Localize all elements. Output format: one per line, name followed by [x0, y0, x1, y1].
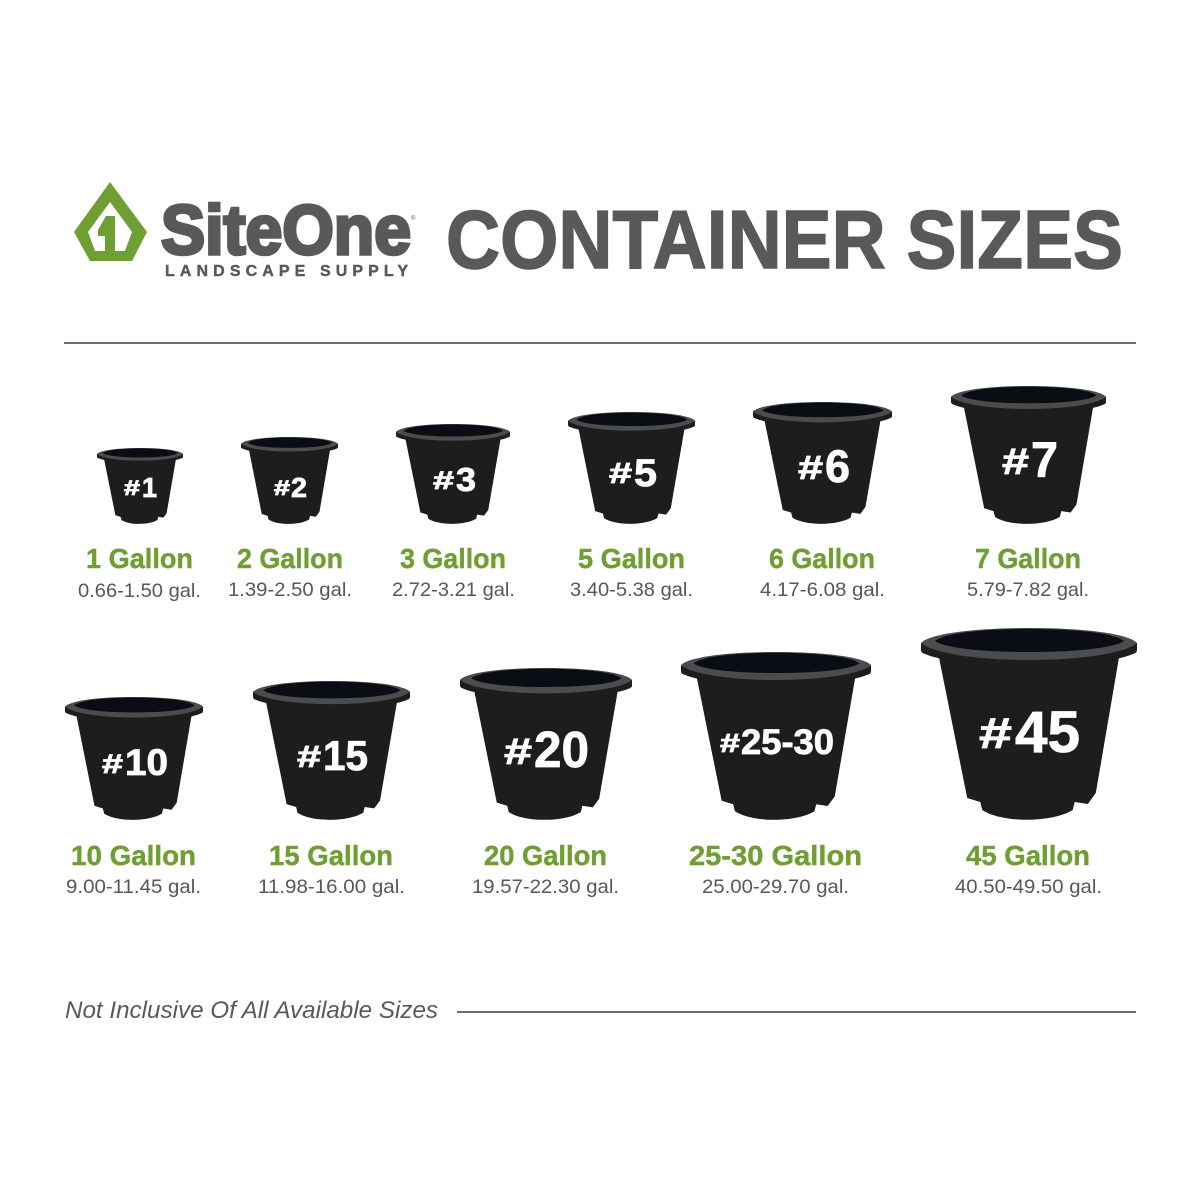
container #2: 2 Gallon	[237, 543, 343, 574]
container #7: #	[1002, 441, 1029, 482]
container #10: 10	[125, 742, 168, 783]
container #20: #	[504, 731, 532, 772]
registered mark: ®	[411, 215, 416, 222]
container #7: 5.79-7.82 gal.	[967, 579, 1089, 601]
container #5: 5 Gallon	[578, 543, 685, 574]
footnote: Not Inclusive Of All Available Sizes	[65, 997, 438, 1024]
container #5	[568, 412, 695, 601]
container #7: 7 Gallon	[975, 543, 1081, 574]
container #1	[78, 448, 201, 602]
container #15: 11.98-16.00 gal.	[258, 876, 405, 898]
container #15: #	[297, 739, 321, 774]
container #7	[951, 386, 1106, 601]
container #1: 1	[142, 472, 157, 503]
container #7: 7	[1031, 432, 1058, 488]
container #25-30: 25-30	[741, 723, 834, 762]
container #1: #	[124, 477, 140, 500]
container #20: 20 Gallon	[484, 840, 607, 871]
container #5: 3.40-5.38 gal.	[570, 579, 693, 601]
container #25-30: 25-30 Gallon	[689, 840, 862, 871]
container #20	[460, 668, 632, 898]
title: CONTAINER SIZES	[446, 193, 1123, 286]
container #45	[921, 628, 1137, 898]
container #45: #	[979, 709, 1012, 758]
container #2: #	[274, 477, 290, 500]
container #15: 15 Gallon	[269, 840, 393, 871]
container #6: 6 Gallon	[769, 543, 875, 574]
logo: SiteOne Landscape Supply	[74, 182, 416, 280]
container #1: 1 Gallon	[86, 543, 193, 574]
container #3: 2.72-3.21 gal.	[392, 579, 515, 601]
container #25-30: 25.00-29.70 gal.	[702, 876, 849, 898]
container #25-30: #	[720, 728, 741, 758]
container #20: 19.57-22.30 gal.	[472, 876, 619, 898]
container #10: #	[102, 749, 123, 779]
container #2: 2	[291, 472, 307, 503]
container #5: #	[609, 458, 632, 490]
container #5: 5	[634, 452, 657, 495]
container #45: 40.50-49.50 gal.	[955, 876, 1102, 898]
container #6: 4.17-6.08 gal.	[760, 579, 885, 601]
container #3: #	[433, 467, 454, 495]
container #10: 10 Gallon	[71, 840, 196, 871]
container #1: 0.66-1.50 gal.	[78, 580, 201, 602]
container #10: 9.00-11.45 gal.	[66, 876, 201, 898]
container #45: 45	[1015, 700, 1080, 765]
container #15	[253, 681, 410, 898]
container #15: 15	[323, 732, 368, 779]
container #10	[65, 697, 203, 898]
container #45: 45 Gallon	[966, 840, 1090, 871]
container #6: 6	[825, 441, 850, 492]
container #6	[753, 402, 892, 601]
logo tagline: LANDSCAPE SUPPLY	[165, 263, 408, 280]
icon: green pentagon with numeral 1	[74, 182, 147, 261]
container #25-30	[681, 652, 871, 898]
container #3: 3 Gallon	[400, 543, 506, 574]
container #6: #	[798, 449, 823, 486]
container #2	[228, 437, 352, 601]
logo wordmark: SiteOne	[161, 191, 411, 269]
container #20: 20	[534, 721, 589, 778]
container #3: 3	[456, 461, 476, 498]
container #3	[392, 424, 515, 601]
container #2: 1.39-2.50 gal.	[228, 579, 352, 601]
